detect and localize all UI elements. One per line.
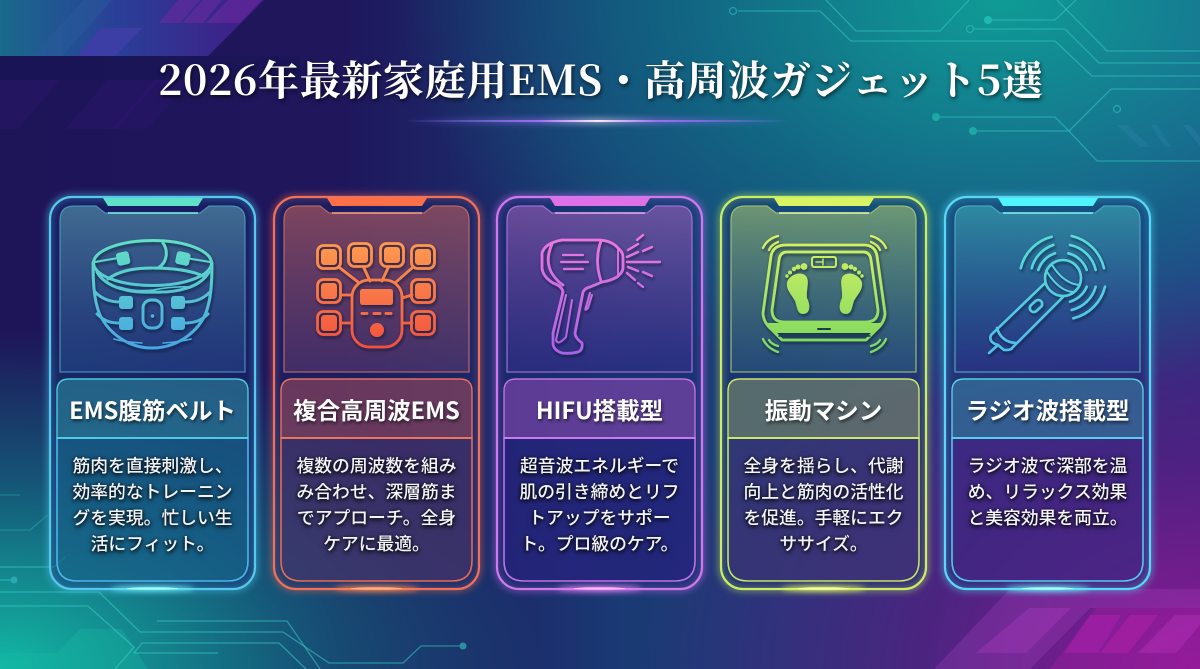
- card heading: ラジオ波搭載型: [965, 392, 1130, 426]
- card heading: HIFU搭載型: [536, 392, 663, 426]
- card description: 効率的なトレーニン: [72, 478, 233, 504]
- card description: め、リラックス効果: [968, 478, 1127, 504]
- card description: [967, 452, 1128, 530]
- card description: 肌の引き締めとリフ: [519, 478, 680, 504]
- icon: multi-pad controller: [318, 244, 434, 347]
- background: bottom-right purple shards: [934, 589, 1200, 669]
- card frame: [945, 197, 1150, 591]
- card description: ササイズ。: [779, 530, 868, 556]
- card 5: ラジオ波搭載型: [945, 197, 1150, 591]
- card 4: 振動マシン: [721, 197, 926, 591]
- card heading: 振動マシン: [765, 392, 882, 426]
- background: bottom-left circuit lines: [0, 495, 466, 669]
- card description: でアプローチ。全身: [297, 504, 456, 530]
- card description: [519, 452, 680, 556]
- card description: 活にフィット。: [91, 530, 214, 556]
- card frame: [50, 197, 255, 591]
- card 1: EMS腹筋ベルト: [50, 197, 255, 591]
- background: top-left stripes: [0, 0, 300, 129]
- card frame: [497, 197, 702, 591]
- title underline glow: [405, 118, 790, 124]
- card heading: EMS腹筋ベルト: [69, 392, 236, 426]
- card description: と美容効果を両立。: [967, 504, 1128, 530]
- card description: を促進。手軽にエク: [743, 504, 904, 530]
- card description: み合わせ、深層筋ま: [296, 478, 457, 504]
- card description: ケアに最適。: [323, 530, 430, 556]
- card frame: [274, 197, 479, 591]
- card description: 筋肉を直接刺激し、: [72, 452, 233, 478]
- background: top-right circuit lines: [730, 0, 1200, 161]
- card 2: 複合高周波EMS: [274, 197, 479, 591]
- card 3: HIFU搭載型: [497, 197, 702, 591]
- card description: [296, 452, 457, 556]
- icon: EMS belt: [93, 240, 212, 348]
- card description: 超音波エネルギーで: [520, 452, 679, 478]
- card description: [72, 452, 233, 556]
- card description: [743, 452, 904, 556]
- card description: 向上と筋肉の活性化: [743, 478, 904, 504]
- card description: 複数の周波数を組み: [296, 452, 457, 478]
- title: 2026年最新家庭用EMS・高周波ガジェット5選: [158, 48, 1047, 107]
- card description: トアップをサポー: [528, 504, 671, 530]
- card description: 全身を揺らし、代謝: [743, 452, 904, 478]
- card frame: [721, 197, 926, 591]
- card description: グを実現。忙しい生: [72, 504, 233, 530]
- icon: HIFU handset: [542, 235, 660, 353]
- card description: ト。プロ級のケア。: [521, 530, 678, 556]
- icon: vibration plate: [763, 236, 886, 352]
- card heading: 複合高周波EMS: [293, 392, 460, 426]
- card description: ラジオ波で深部を温: [968, 452, 1128, 478]
- icon: radio-frequency wand: [989, 236, 1105, 353]
